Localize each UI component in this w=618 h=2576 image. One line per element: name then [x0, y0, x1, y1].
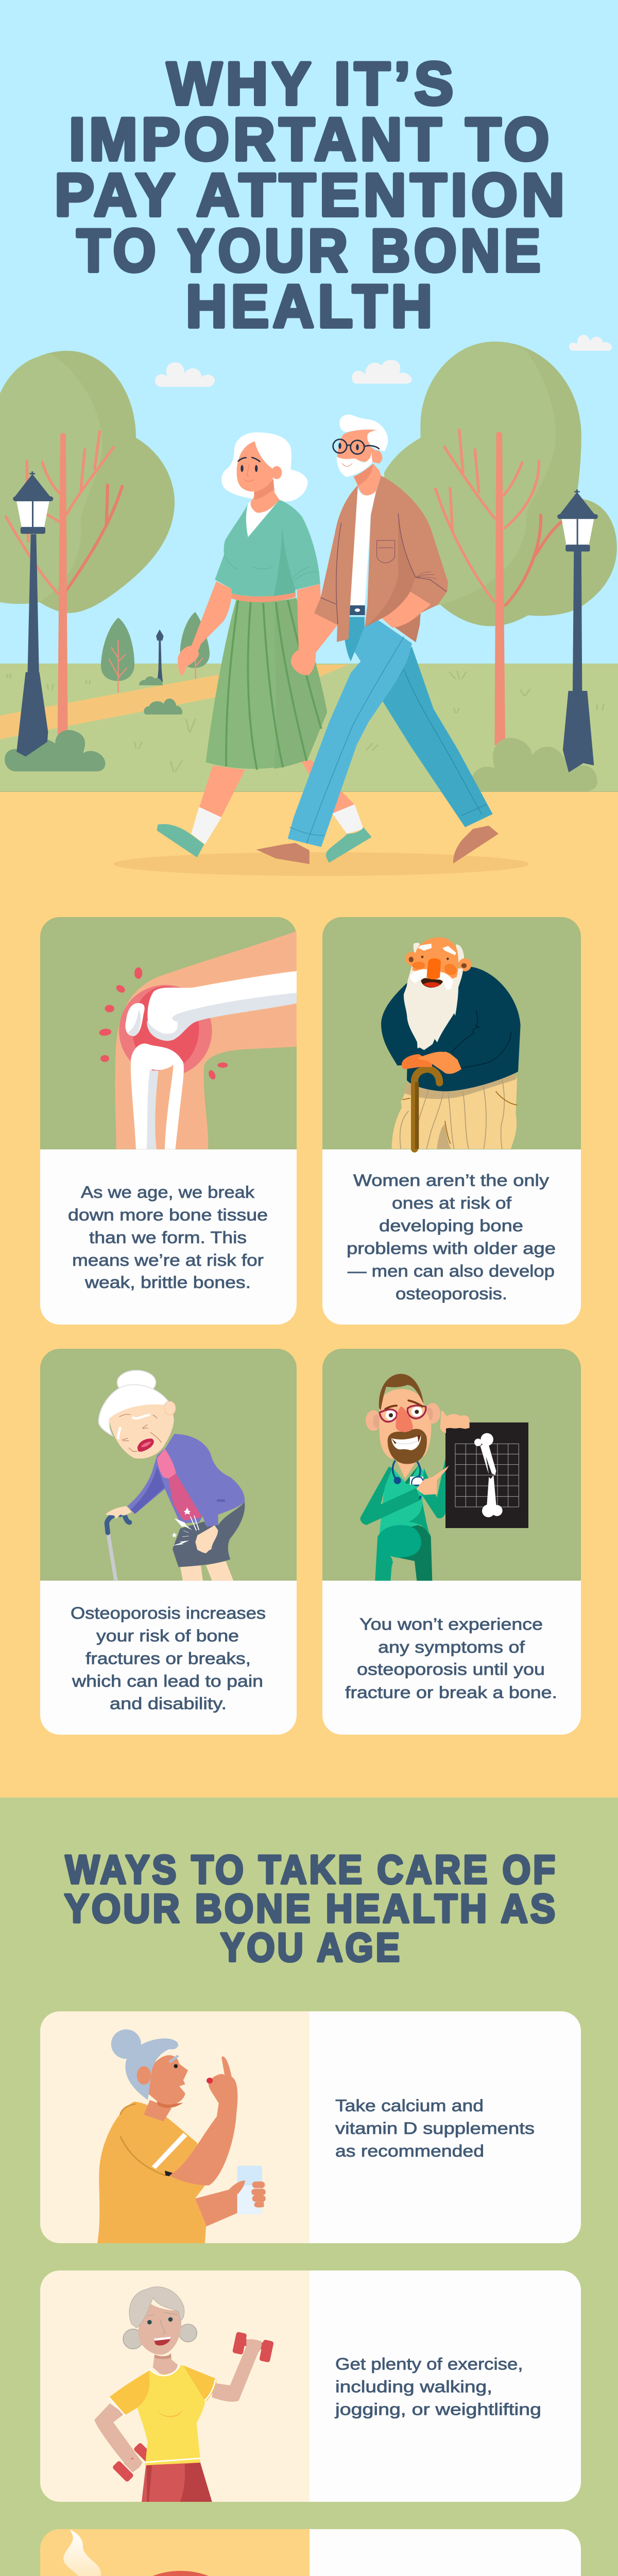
section heading: YOU AGE — [220, 1925, 402, 1970]
man head — [333, 415, 388, 477]
card image background — [40, 1349, 297, 1581]
text area background — [310, 2529, 581, 2576]
woman left hand — [178, 646, 199, 676]
small distant lamp — [156, 630, 164, 682]
man upper body — [291, 415, 448, 675]
card image background — [322, 917, 581, 1149]
ground grass — [0, 664, 618, 792]
far leg and sneaker — [301, 760, 372, 863]
card text: fracture or break a bone. — [345, 1683, 557, 1702]
woman upper body — [189, 432, 321, 653]
card image background — [322, 1349, 581, 1581]
brown jacket — [314, 476, 448, 642]
woman face — [237, 442, 282, 492]
section heading: WAYS TO TAKE CARE OF — [65, 1846, 558, 1892]
card text: Women aren’t the only — [353, 1171, 549, 1190]
card text: Osteoporosis increases — [71, 1604, 266, 1622]
image area background — [40, 2529, 310, 2576]
icon: woman lifting dumbbells — [94, 2287, 274, 2502]
right street lamp — [557, 489, 598, 772]
card text: your risk of bone — [96, 1626, 239, 1645]
icon: no smoking sign — [63, 2530, 263, 2576]
card text background — [322, 1581, 581, 1735]
title: HEALTH — [186, 272, 436, 340]
sandy ground band — [0, 792, 618, 1798]
icon: bearded old man with cane — [381, 937, 521, 1149]
ground shadow — [113, 852, 529, 876]
card text: osteoporosis. — [396, 1284, 507, 1303]
option text: vitamin D supplements — [335, 2119, 535, 2138]
bushes — [5, 676, 182, 771]
option text: jogging, or weightlifting — [335, 2400, 541, 2418]
card text: ones at risk of — [392, 1194, 511, 1212]
panel: calcium and vitamin D — [40, 2011, 581, 2243]
card text background — [322, 1149, 581, 1325]
woman arms — [189, 581, 321, 653]
card text — [347, 1171, 556, 1303]
woman white undershirt — [246, 500, 280, 537]
card text — [68, 1183, 268, 1292]
title: TO YOUR BONE — [77, 216, 544, 284]
option text: as recommended — [335, 2142, 484, 2160]
card text: and disability. — [110, 1694, 227, 1713]
text area background — [310, 2270, 581, 2502]
section heading — [64, 1846, 558, 1970]
panel: bone loss card — [40, 917, 297, 1325]
small distant trees — [101, 612, 210, 692]
front brown shoe — [256, 843, 310, 864]
option text: including walking, — [335, 2377, 492, 2396]
panel: men at risk card — [322, 917, 581, 1325]
option text: Take calcium and — [335, 2096, 484, 2115]
card text: down more bone tissue — [68, 1206, 268, 1224]
card text: — men can also develop — [348, 1262, 555, 1280]
title — [55, 49, 569, 340]
card text: means we’re at risk for — [72, 1251, 264, 1269]
front jeans leg — [288, 617, 412, 847]
panel: no symptoms card — [322, 1349, 581, 1735]
card text: fractures or breaks, — [85, 1649, 251, 1668]
near leg and sneaker — [157, 766, 245, 857]
card text: As we age, we break — [81, 1183, 255, 1201]
card text: developing bone — [379, 1216, 523, 1235]
jacket pocket — [377, 540, 395, 563]
right tree — [384, 342, 617, 745]
card text: any symptoms of — [378, 1638, 525, 1656]
white t-shirt — [350, 488, 376, 605]
card image background — [40, 917, 297, 1149]
prohibition ring — [102, 2571, 259, 2576]
man walking — [256, 415, 499, 864]
title: PAY ATTENTION — [55, 161, 569, 229]
option text — [335, 2354, 541, 2418]
image area background — [40, 2270, 310, 2502]
option text: Get plenty of exercise, — [335, 2354, 523, 2373]
image area background — [40, 2011, 310, 2243]
title: IMPORTANT TO — [69, 105, 553, 173]
woman walking — [157, 432, 372, 863]
green section background — [0, 1798, 618, 2576]
icon: elderly woman with hip pain — [98, 1370, 245, 1581]
card text — [345, 1615, 557, 1702]
card text: which can lead to pain — [72, 1672, 263, 1690]
card text — [71, 1604, 266, 1713]
icon: doctor with bone x-ray — [360, 1374, 528, 1581]
sand path — [0, 665, 349, 739]
panel: exercise — [40, 2270, 581, 2502]
text area background — [310, 2011, 581, 2243]
left street lamp — [13, 471, 53, 757]
clouds — [155, 335, 612, 387]
woman lower body — [157, 598, 372, 863]
card text: weak, brittle bones. — [84, 1273, 251, 1292]
card text: than we form. This — [89, 1228, 247, 1247]
pleated skirt — [205, 598, 327, 770]
hand in pocket — [382, 591, 431, 628]
card text: problems with older age — [347, 1239, 556, 1258]
title: WHY IT’S — [167, 49, 457, 117]
back jeans leg — [382, 647, 493, 827]
grass tufts — [7, 671, 604, 771]
icon: inflamed knee joint — [97, 931, 297, 1149]
card text background — [40, 1581, 297, 1735]
left tree — [0, 351, 175, 738]
man arm and hands — [291, 613, 338, 675]
sky background — [0, 0, 618, 664]
panel: quit smoking — [40, 2529, 581, 2576]
woman hair — [221, 432, 308, 501]
man lower body — [256, 617, 499, 864]
woman neck — [251, 478, 280, 513]
back brown shoe — [453, 825, 499, 863]
section heading: YOUR BONE HEALTH AS — [64, 1886, 558, 1931]
glasses — [333, 439, 380, 454]
panel: fracture risk card — [40, 1349, 297, 1735]
belt — [350, 605, 365, 615]
option text — [335, 2096, 535, 2160]
icon: woman taking a pill — [97, 2029, 266, 2243]
smoke — [63, 2530, 101, 2576]
man neck — [354, 464, 381, 496]
card text: osteoporosis until you — [357, 1660, 545, 1679]
card text: You won’t experience — [359, 1615, 543, 1634]
park background — [0, 335, 618, 876]
card text background — [40, 1149, 297, 1325]
waist skin — [231, 592, 296, 602]
green blouse — [215, 500, 320, 597]
